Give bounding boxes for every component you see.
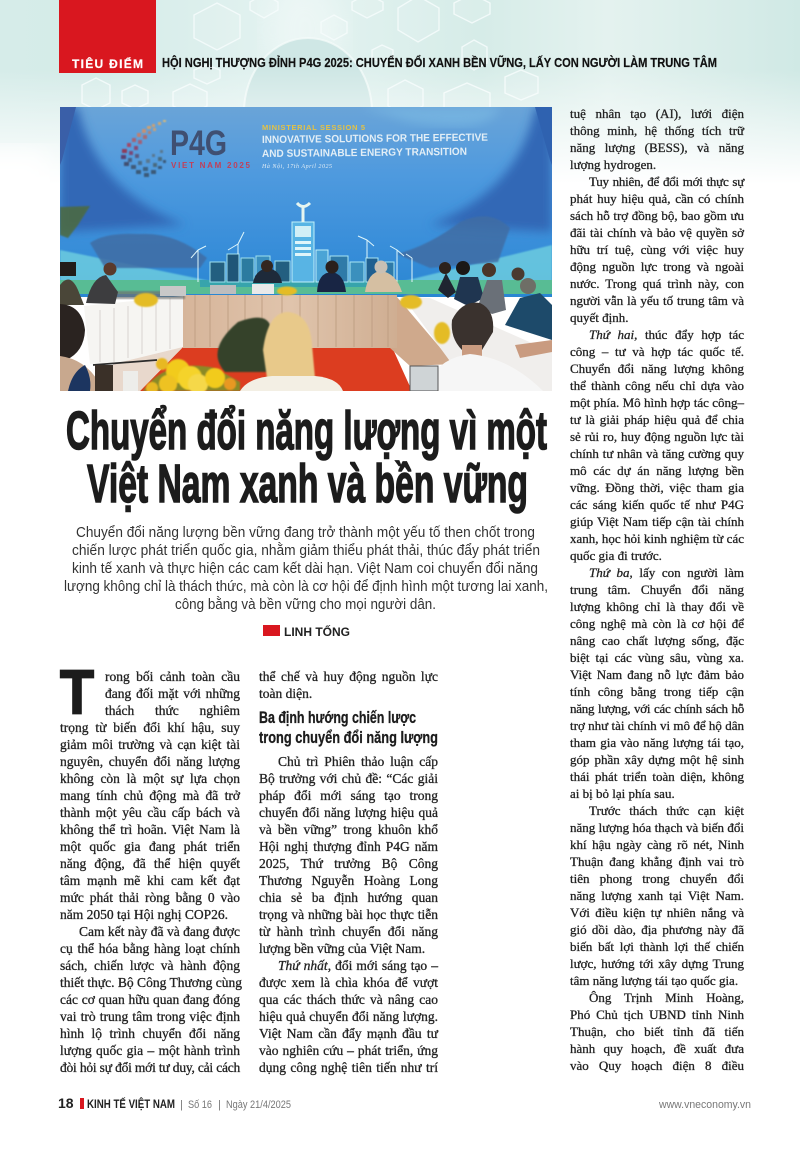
paragraph: Ninh Thuận pioneer: tâm năng lượng tái tạo quốc gia. [570, 972, 738, 988]
paragraph: session overview: trọng và những bài học thực tiễn [259, 906, 438, 922]
paragraph: policy support: động nguồn lực trong và ngoài [570, 258, 744, 274]
paragraph: second direction: thể thành công nếu chỉ dựa vào [570, 378, 744, 392]
paragraph: session overview: 2025, Thứ trưởng Bộ Công [259, 856, 438, 870]
paragraph: policy commitments: hình lộ trình chuyển đổi năng [60, 1026, 240, 1040]
paragraph: introduction: năng động, đã thể hiện quyết [60, 856, 240, 870]
backdrop logo: VIET NAM 2025 [171, 161, 251, 170]
paragraph: first direction: Việt Nam cần đẩy mạnh đầu tư [259, 1026, 438, 1040]
paragraph: provincial planning: vào Quy hoạch điện 8 điều [570, 1058, 744, 1072]
paragraph: introduction: giảm môi trường và cạn kiệt tài [60, 736, 240, 752]
backdrop [60, 107, 552, 297]
paragraph: policy commitments: vai trò trung tâm trong việc định [60, 1008, 240, 1024]
paragraph: policy commitments: các cơ quan hữu quan đang đóng [60, 992, 240, 1006]
centre plant [217, 318, 270, 372]
paragraph: Ninh Thuận pioneer [570, 802, 744, 988]
footer: page number and publication: KINH TẾ VIỆT NAM [87, 1096, 175, 1111]
text column 3 [570, 106, 745, 1073]
paragraph: introduction: đang đối mặt với những [105, 686, 240, 700]
paragraph: first direction: qua các thách thức và nâng cao [259, 992, 438, 1006]
paragraph: policy support: nước. Trong quá trình này, con [570, 276, 744, 290]
paragraph: introduction: không còn là một sự lựa chọn [60, 770, 240, 786]
paragraph: first direction: vào nghiên cứu – phát triển, ứng [259, 1042, 438, 1058]
speakers at head table [253, 260, 402, 292]
paragraph: second direction: giúp Việt Nam tiếp cận tài chính [570, 514, 744, 528]
paragraph: session overview: và bền vững” trong khuôn khổ [259, 822, 438, 836]
paragraph: Ninh Thuận pioneer: năng lượng hóa thạch và biến đổi [570, 820, 744, 834]
standfirst paragraph: lượng không chỉ là thách thức, mà còn là cơ hội để định hình một tương lai xanh, [64, 578, 548, 595]
paragraph: second direction: mô các dự án năng lượng bền [570, 462, 744, 478]
paragraph: second direction: các sáng kiến quốc tế như P4G [570, 496, 744, 512]
section tag: TIÊU ĐIỂM [59, 0, 156, 73]
paragraph: policy support: phát huy hiệu quả, cần có chính [570, 190, 744, 206]
red carpet [140, 347, 412, 391]
paragraph: third direction: góp phần xây dựng một hệ sinh [570, 752, 744, 766]
paragraph: second direction: Thứ hai, thúc đẩy hợp tác [589, 326, 744, 342]
standfirst paragraph: Chuyển đổi năng lượng bền vững đang trở thành một yếu tố then chốt trong [76, 524, 535, 541]
foreground attendee with blonde hair [240, 312, 343, 391]
backdrop city skyline [191, 203, 412, 282]
header background with eco icons [0, 0, 800, 164]
paragraph: Ninh Thuận pioneer: Với điều kiện tự nhiên nắng và [570, 904, 744, 920]
backdrop logo: INNOVATIVE SOLUTIONS FOR THE EFFECTIVE [262, 132, 488, 146]
paragraph: technologies: tuệ nhân tạo (AI), lưới điện [570, 106, 744, 120]
footer: page number and publication: Số 16 [188, 1099, 212, 1111]
paragraph: introduction: một quốc gia đang phát triển [60, 838, 240, 854]
paragraph: second direction: xanh, học hỏi kinh nghiệm từ các [570, 530, 744, 546]
paragraph: first direction: được xem là chìa khóa để vượt [259, 974, 438, 990]
paragraph: second direction: tư là giải pháp hiệu quả để chia [570, 412, 744, 426]
delegates at right side [438, 261, 552, 340]
paragraph: third direction: nâng cao chất lượng sống, đặc [570, 632, 744, 648]
paragraph: first direction: hiệu quả chuyển đổi năng lượng. [259, 1008, 438, 1024]
paragraph: session overview: Bộ trưởng với chủ đề: “Các giải [259, 770, 438, 786]
paragraph: Ninh Thuận pioneer: biến bất lợi thành lợi thế chiến [570, 938, 744, 954]
paragraph: continuation: toàn diện. [259, 686, 312, 700]
paragraph: session overview: pháp đổi mới sáng tạo trong [259, 788, 438, 802]
paragraph: session overview: Thương Nguyễn Hoàng Long [259, 872, 438, 888]
paragraph: Ninh Thuận pioneer: Thuận đang khẳng định vai trò [570, 854, 744, 868]
paragraph: first direction: dụng công nghệ tiên tiến như trí [259, 1060, 438, 1074]
backdrop mountains and palm [60, 206, 510, 268]
paragraph: second direction: quốc gia đi trước. [570, 548, 662, 562]
icon: author marker [263, 625, 280, 636]
paragraph: provincial planning [570, 990, 744, 1073]
paragraph: technologies: lượng hydrogen. [570, 156, 656, 172]
paragraph: introduction: trọng từ biến đổi khí hậu, suy [60, 720, 240, 734]
backdrop logo: MINISTERIAL SESSION 5 [262, 123, 365, 132]
paragraph: second direction: công – tư và hợp tác quốc tế. [570, 344, 744, 358]
paragraph: Ninh Thuận pioneer: tiên phong trong chuyển đổi [570, 870, 744, 886]
paragraph: third direction: ai bị bỏ lại phía sau. [570, 786, 675, 800]
paragraph: Ninh Thuận pioneer: Trước thách thức cạn kiệt [589, 802, 744, 818]
paragraph: session overview: từ hành trình chuyển đổi năng [259, 924, 438, 938]
paragraph: session overview: chuyển đổi năng lượng hiệu quả [259, 804, 438, 820]
paragraph: policy commitments: Cam kết này đã và đang được [79, 924, 240, 938]
paragraph: third direction: thái phát triển toàn diện, không [570, 768, 744, 784]
main title [66, 401, 548, 514]
section tag: TIÊU ĐIỂM: TIÊU ĐIỂM [72, 56, 143, 71]
paragraph: Ninh Thuận pioneer: khí hậu ngày càng rõ nét, Ninh [570, 836, 744, 852]
paragraph: second direction: vững. Đồng thời, việc tham gia [570, 480, 744, 494]
footer: page number and publication [58, 1095, 751, 1111]
paragraph: session overview: Hội nghị thượng đỉnh P4G năm [259, 838, 438, 854]
footer: page number and publication: 18 [58, 1095, 74, 1111]
subheading: three strategic directions [259, 708, 438, 747]
paragraph: policy support: quyết định. [570, 310, 628, 324]
footer: page number and publication: Ngày 21/4/2025 [226, 1099, 291, 1111]
paragraph: policy support: sách hỗ trợ đồng bộ, bao gồm ưu [570, 208, 744, 222]
paragraph: introduction: tâm mạnh mẽ khi cam kết đạt [60, 872, 240, 888]
paragraph: introduction: thách thức nghiêm [105, 702, 240, 718]
standfirst paragraph: công bằng và bền vững cho mọi người dân. [175, 596, 436, 613]
paragraph: technologies: thông minh, hệ thống tích trữ [570, 122, 744, 138]
paragraph: introduction: thành một yêu cầu cấp bách và [60, 804, 240, 820]
foreground yellow flowers [143, 358, 240, 394]
paragraph: introduction: rong bối cảnh toàn cầu [105, 668, 240, 684]
foreground attendee at right [410, 303, 552, 391]
paragraph: session overview: Chủ trì Phiên thảo luận cấp [278, 754, 438, 768]
paragraph: continuation [259, 668, 438, 700]
paragraph: policy commitments: sách, chiến lược và hành động [60, 958, 240, 972]
text column 2 [258, 668, 438, 1076]
flower arrangements [134, 286, 450, 344]
paragraph: Ninh Thuận pioneer: gió dồi dào, địa phương này đã [570, 922, 744, 936]
paragraph: third direction: công nghệ mà còn là cơ hội để [570, 616, 744, 630]
paragraph: second direction: chính tư nhân và tăng cường quy [570, 446, 744, 460]
paragraph: session overview: lượng bền vững của Việt Nam. [259, 940, 425, 956]
paragraph: third direction: Việt Nam đang nỗ lực đảm bảo [570, 666, 744, 682]
paragraph: provincial planning: Ông Trịnh Minh Hoàng, [589, 990, 744, 1004]
paragraph: second direction: một phía. Mô hình hợp tác công– [570, 394, 744, 410]
backdrop logo [121, 120, 488, 177]
paragraph: introduction: nguyên, chuyển đổi năng lượng [60, 754, 240, 768]
paragraph: technologies: năng lượng (BESS), và năng [570, 140, 744, 154]
paragraph: provincial planning: Thuận, cho biết tỉnh đã tiến [570, 1024, 744, 1038]
paragraph: Ninh Thuận pioneer: lược, hướng tới xây dựng Trung [570, 956, 744, 970]
paragraph: session overview: chia sẻ ba định hướng quan [259, 890, 438, 904]
backdrop logo: P4G [170, 124, 227, 163]
paragraph: third direction: trung tâm. Chuyển đổi năng [570, 582, 744, 596]
standfirst paragraph: kinh tế xanh và thực hiện các cam kết dài hạn. Việt Nam coi chuyển đổi năng [72, 560, 538, 577]
paragraph: second direction: Chuyển đổi năng lượng không [570, 360, 744, 376]
footer: page number and publication: | [218, 1099, 221, 1111]
paragraph: technologies [570, 106, 744, 172]
paragraph: policy commitments: đòi hỏi sự đổi mới tư duy, cải cách [60, 1060, 240, 1074]
byline: LINH TỐNG [284, 624, 350, 639]
standfirst paragraph [64, 524, 548, 613]
paragraph: third direction: Thứ ba, lấy con người làm [589, 564, 744, 580]
paragraph: second direction: sẻ rủi ro, huy động nguồn lực tài [570, 428, 744, 444]
paragraph: provincial planning: hành quy hoạch, đề xuất đưa [570, 1040, 744, 1056]
paragraph: third direction: tính công bằng trong tiếp cận [570, 684, 744, 698]
main title: Việt Nam xanh và bền vững [87, 454, 528, 514]
paragraph: provincial planning: Phó Chủ tịch UBND tỉnh Ninh [570, 1006, 744, 1022]
foreground attendee at left [60, 304, 157, 391]
paragraph: policy commitments: lượng quốc gia – một hành trình [60, 1042, 240, 1058]
paragraph: introduction: mang tính chủ động mà đã trở [60, 788, 240, 802]
paragraph: third direction: trợ như tài chính vi mô để hộ dân [570, 718, 744, 732]
paragraph: third direction: biệt tại các vùng sâu, vùng xa. [570, 650, 744, 664]
paragraph: continuation: thể chế và huy động nguồn lực [259, 668, 438, 684]
footer: page number and publication: | [180, 1099, 183, 1111]
text column 1 [60, 668, 242, 1076]
paragraph: session overview [258, 754, 438, 956]
paragraph: policy support: hữu trí tuệ, cùng với việc huy [570, 242, 744, 256]
paragraph: Ninh Thuận pioneer: năng lượng xanh tại Việt Nam. [570, 888, 744, 902]
paragraph: policy commitments: cụ thể hóa bằng hàng loạt chính [60, 940, 240, 956]
paragraph: policy support: Tuy nhiên, để đổi mới thực sự [589, 174, 744, 188]
paragraph: introduction: không thể trì hoãn. Việt Nam là [60, 822, 240, 836]
paragraph: introduction: mức phát thải ròng bằng 0 vào [60, 890, 240, 904]
photo: P4G ministerial session conference room [60, 107, 552, 391]
backdrop logo: Hà Nội, 17th April 2025 [261, 164, 332, 170]
paragraph: first direction: Thứ nhất, đổi mới sáng tạo – [278, 958, 438, 972]
paragraph: introduction: năm 2050 tại Hội nghị COP26. [60, 906, 228, 922]
delegates at left side [60, 262, 118, 305]
paragraph: first direction [258, 958, 438, 1076]
paragraph: third direction: năng lượng, với các chính sách hỗ [570, 700, 744, 716]
paragraph: policy commitments: thiết thực. Bộ Công Thương cùng [60, 974, 242, 990]
paragraph: second direction [570, 326, 744, 563]
backdrop logo: AND SUSTAINABLE ENERGY TRANSITION [262, 146, 467, 160]
paragraph: policy commitments [60, 924, 242, 1076]
paragraph: third direction: tham gia vào năng lượng tái tạo, [570, 734, 744, 750]
footer: page number and publication: www.vneconomy.vn [658, 1099, 751, 1111]
standfirst paragraph: chiến lược phát triển quốc gia, nhằm giảm thiểu phát thải, thúc đẩy phát triển [72, 542, 540, 559]
conference tables and curtains [84, 284, 552, 391]
paragraph: introduction [60, 668, 240, 922]
paragraph: third direction: lượng không chỉ là thay đổi về [570, 598, 744, 614]
paragraph: third direction [570, 564, 744, 801]
paragraph: policy support: người vẫn là yếu tố trung tâm và [570, 292, 744, 308]
paragraph: policy support: đãi tài chính và bảo vệ quyền sở [570, 224, 744, 240]
paragraph: policy support [570, 174, 745, 325]
